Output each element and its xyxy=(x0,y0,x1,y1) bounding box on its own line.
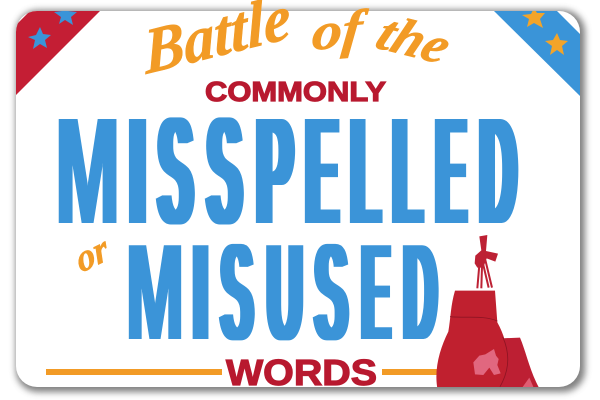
word: COMMONLY: COMMONLY xyxy=(205,76,386,107)
word: MISSPELLED: M xyxy=(56,84,120,259)
word: MISSPELLED: L xyxy=(351,84,380,259)
word: MISUSED: I xyxy=(193,213,208,372)
icon: gold star right xyxy=(545,33,568,55)
word: MISUSED: M xyxy=(126,213,184,372)
word: MISUSED: E xyxy=(362,213,390,372)
icon: blue star top xyxy=(54,11,77,25)
icon: gold star xyxy=(522,11,545,28)
word: WORDS: WORDS xyxy=(226,352,377,393)
icon: blue star xyxy=(28,27,51,49)
corner ribbon: blue with gold stars xyxy=(494,8,580,96)
word: MISUSED: S xyxy=(221,213,253,372)
word: MISUSED: S xyxy=(315,213,347,372)
corner ribbon: red with blue stars xyxy=(16,8,100,95)
word: MISSPELLED xyxy=(56,84,516,259)
word: MISSPELLED: I xyxy=(130,84,146,259)
rule right xyxy=(382,369,438,375)
glove emblem xyxy=(473,349,501,375)
word: MISSPELLED: L xyxy=(393,84,422,259)
word: MISSPELLED: E xyxy=(306,84,338,259)
word: MISUSED xyxy=(126,213,437,372)
word: MISSPELLED: S xyxy=(158,84,192,259)
script heading: Battle of the: of xyxy=(310,0,370,62)
script word: or: or xyxy=(71,227,114,282)
word: MISUSED: U xyxy=(267,213,302,372)
script heading: Battle of the xyxy=(141,0,460,88)
front glove xyxy=(436,291,507,388)
script heading: Battle of the: the xyxy=(368,5,460,75)
word: MISSPELLED: E xyxy=(436,84,466,259)
rear glove xyxy=(498,338,539,388)
word: MISSPELLED: S xyxy=(208,84,241,259)
icon: boxing gloves xyxy=(436,235,539,388)
card: D xyxy=(480,84,516,259)
card: D xyxy=(404,213,437,372)
hanging laces xyxy=(475,235,498,288)
rule left xyxy=(46,369,222,375)
word: MISSPELLED: P xyxy=(257,84,292,259)
